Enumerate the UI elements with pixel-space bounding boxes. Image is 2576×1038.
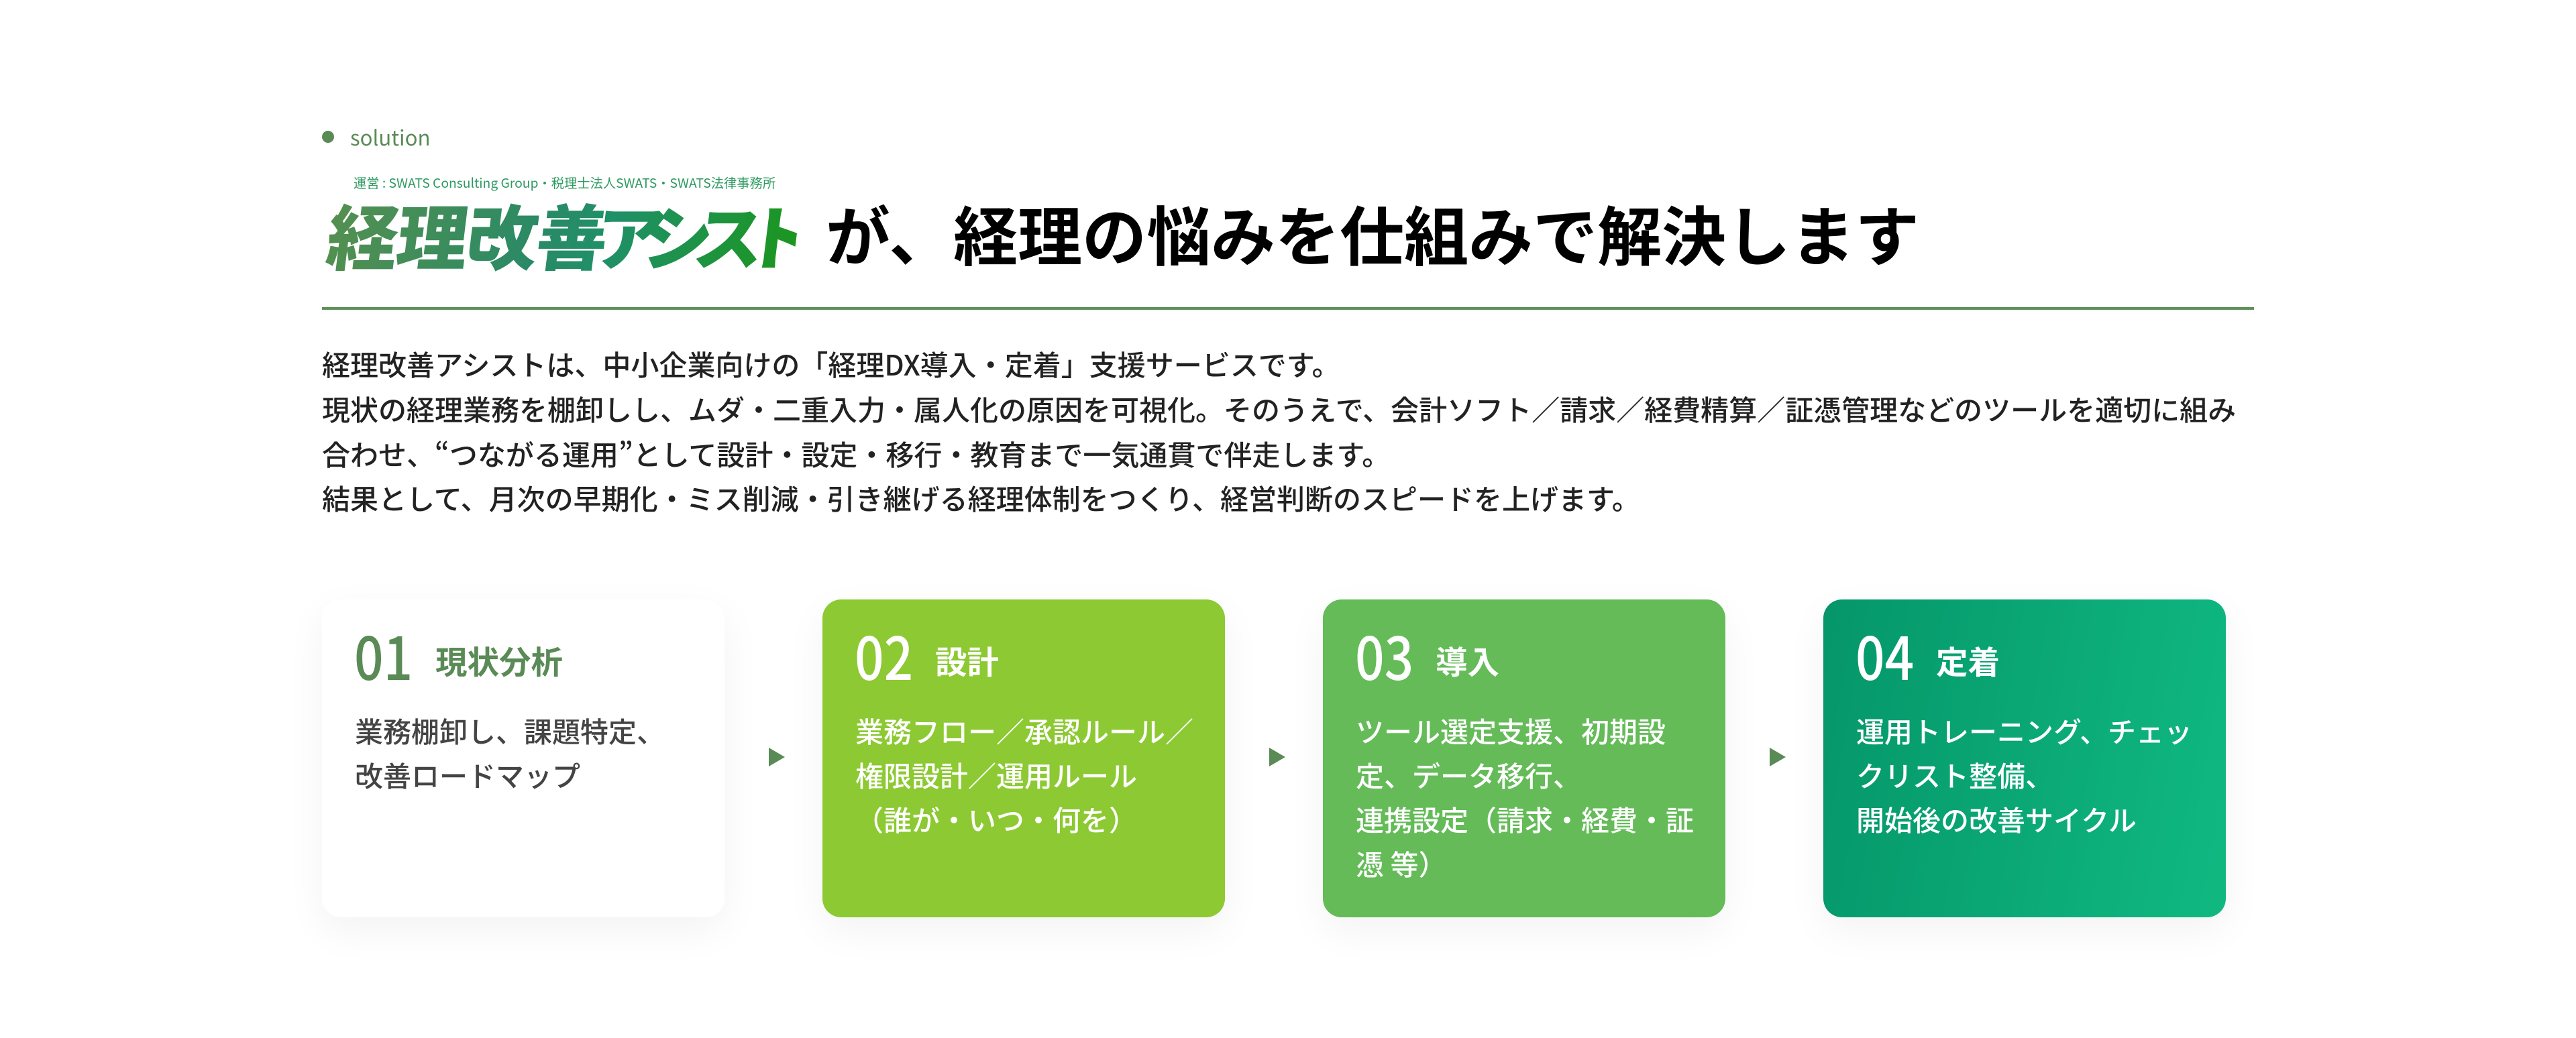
step description: 改善ロードマップ [355, 754, 580, 795]
step description: 定、データ移行、 [1356, 754, 1581, 795]
step title: 設計 [935, 637, 999, 683]
step description [855, 710, 1193, 840]
step number 01: 01 [354, 612, 413, 697]
step description [1856, 710, 2192, 840]
arrow 3 [1770, 748, 1786, 766]
introduction text: 合わせ、“つながる運用”として設計・設定・移行・教育まで一気通貫で伴走します。 [322, 433, 1390, 474]
step number 04: 04 [1856, 612, 1914, 697]
introduction text [322, 343, 2236, 518]
panel: step 01 [322, 599, 724, 917]
step description: 開始後の改善サイクル [1856, 799, 2137, 840]
step description: ツール選定支援、初期設 [1356, 710, 1666, 751]
step description [355, 710, 665, 795]
step description: （誰が・いつ・何を） [855, 799, 1137, 840]
step description: 業務棚卸し、課題特定、 [355, 710, 665, 751]
arrow 1 [769, 748, 785, 766]
step description [1356, 710, 1694, 884]
operator note: 運営 : SWATS Consulting Group・税理士法人SWATS・SWATS法律事務所 [354, 173, 775, 192]
step title: 定着 [1936, 637, 2000, 683]
heading rule [322, 307, 2254, 310]
introduction text: 経理改善アシストは、中小企業向けの「経理DX導入・定着」支援サービスです。 [322, 343, 1340, 384]
step title: 導入 [1436, 637, 1499, 683]
step description: 憑 等） [1356, 843, 1446, 884]
step title: 現状分析 [435, 637, 563, 683]
section label: solution: solution [350, 121, 431, 152]
step description: 権限設計／運用ルール [855, 754, 1137, 795]
logo wordmark: 経理改善アシスト [322, 182, 803, 285]
step description: 業務フロー／承認ルール／ [855, 710, 1193, 751]
panel: step 02 [822, 599, 1225, 917]
panel: step 04 [1823, 599, 2226, 917]
introduction text: 現状の経理業務を棚卸しし、ムダ・二重入力・属人化の原因を可視化。そのうえで、会計ソフト／請求／経費精算／証憑管理などのツールを適切に組み [322, 388, 2236, 429]
step number 03: 03 [1355, 612, 1413, 697]
step number 02: 02 [855, 612, 913, 697]
section marker dot [322, 131, 334, 143]
introduction text: 結果として、月次の早期化・ミス削減・引き継げる経理体制をつくり、経営判断のスピードを上げます。 [322, 477, 1640, 518]
panel: step 03 [1323, 599, 1725, 917]
step description: 運用トレーニング、チェッ [1856, 710, 2192, 751]
step description: クリスト整備、 [1856, 754, 2053, 795]
main heading: が、経理の悩みを仕組みで解決します [826, 186, 1919, 279]
step description: 連携設定（請求・経費・証 [1356, 799, 1694, 840]
arrow 2 [1269, 748, 1285, 766]
